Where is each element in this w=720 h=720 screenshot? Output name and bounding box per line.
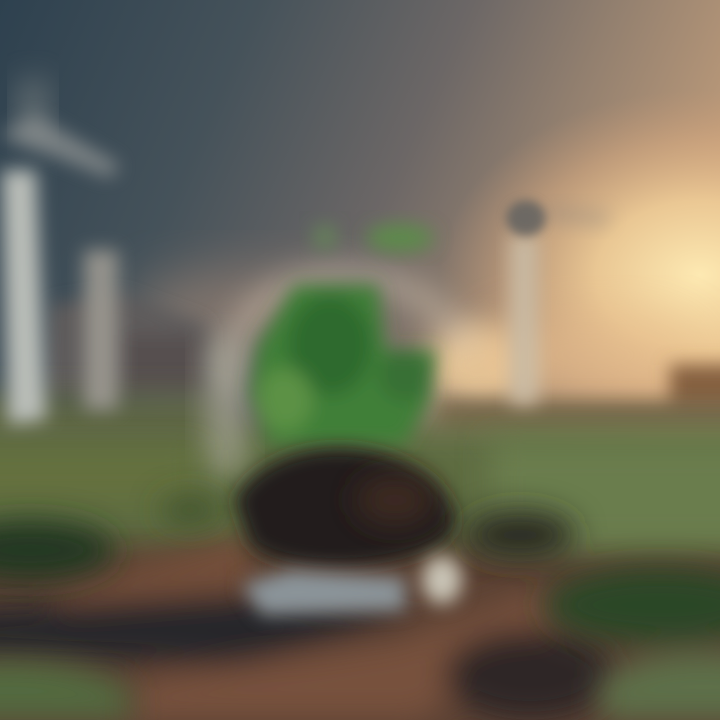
soil paths [0,535,615,720]
sky background [0,0,720,500]
sun glow [130,90,720,460]
wind turbine right [506,200,610,405]
sapling leaves [250,224,436,445]
pale rocks and water at base [242,556,462,615]
wind turbine left [0,80,120,425]
grass field highlights [0,440,720,550]
soil base [0,540,720,720]
wind turbine second [84,250,118,410]
distant hills [45,295,720,435]
rainbow arc [225,276,470,400]
foreground bushes [0,497,720,720]
ground [0,395,720,545]
wind turbine centre pale tower [205,340,245,475]
mound of soil [235,448,454,567]
